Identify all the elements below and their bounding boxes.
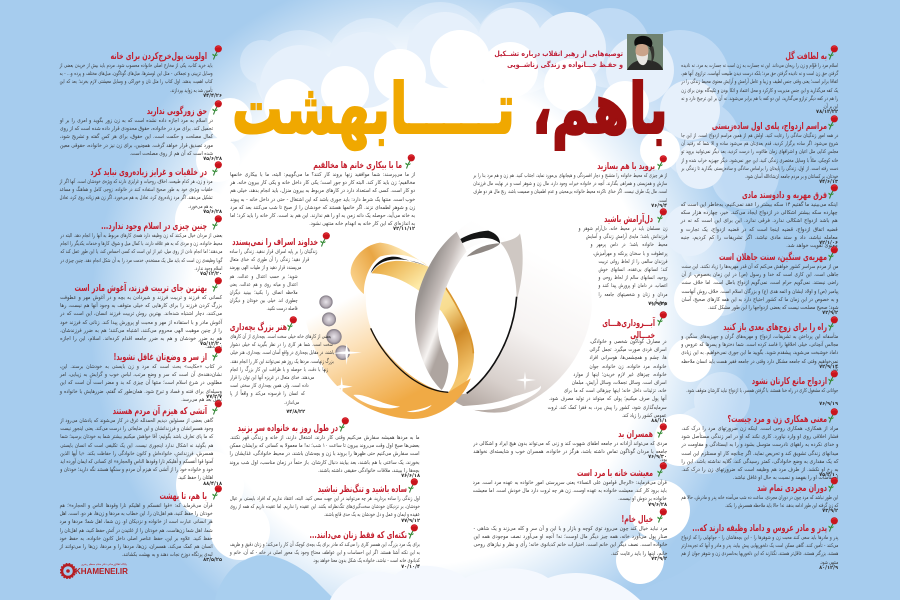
body text: زندگیتان را بر پایه اسراف قرار ندهید. زندگی را ساده قرار دهید؛ زندگی را آن طوری که خدای متعال می‌پسندد قرار دهید و از طیبات الهی بهرمند شوید؛ بر حسب اعتدال و عدالت. هم اعتدال و میانه روی و هم عدالت. یعنی ملاحظه انصاف را بکنید؛ ببینید دیگران چطوری اند. خیلی بین خودتان و دیگران فاصله درست نکنید. [230,249,318,312]
logo [60,563,128,579]
section: left column 3 [59,161,222,215]
body text: کسانی که فرزند و تربیت فرزند و شیردادن به بچه و در آغوش مهر و عطوفت بزرگ کردن فرزند را برای کارهایی که خیلی متوقف به وجود آنها هم نیست، رها می‌کنند، دچار اشتباه شده‌اند. بهترین روش تربیت فرزند انسان، این است که در آغوش مادر و با استفاده از مهر و محبت او پرورش پیدا کند. زنانی که فرزند خود را از چنین موهبت الهی محروم می‌کنند، اشتباه می‌کنند؛ هم به ضرر فرزندشان، هم به ضرر خودشان و هم به ضرر جامعه اقدام کرده‌اند. اسلام، این را اجازه نمی‌دهد. [60,295,222,350]
date: ۷۳/۹/۲ [822,508,838,514]
body text: در اسلام به مرد اجازه داده نشده است که به زن زور بگوید و امری را بر او تحمیل کند. برای مرد در خانواده، حقوق محدودی قرار داده شده است که از روی کمال مصلحت و حکمت است. این حقوق، برای هر کس گفته و تشریح شود، مورد تصدیق قرار خواهد گرفت. همچنین، برای زن نیز در خانواده، حقوقی معین شده است که آن هم از روی مصلحت است. [60,118,213,157]
heading: دوران مجردی تمام شد [757,483,827,494]
body text: اینکه می‌بینید ما گفتیم ۱۴ سکه بیشتر را عقد نمی‌کنیم، به‌خاطر این است که چهارده سکه بیشتر اشکالی در ازدواج ایجاد می‌کند. خیر، چهارده هزار سکه هم باشد ازدواج اشکالی ندارد. فرقی ندارد. این برای این است که نه در قضیه اتفاق ازدواج، قضیه اینجا است که در قضیه ازدواج، یک تجارت و معامله نباشد، داد و ستد مادی نباشد. اگر تشریفات را کم کردیم، جنبه معنوی تقویت خواهد شد. [681,202,838,249]
heading [584,318,655,338]
section: center-right 5 [473,469,667,509]
date: ۷۵/۱۲/۲۰ [200,271,222,277]
body text: متأسفانه این پرداختن به تشریفات، ازدواج و مهریه‌های گران و جهیزیه‌های سنگین و مجالس آنچنانی، خیلی اخلاقها را فاسد کرده است. شما دخترها و پسرها که عروس و داماد خوشبخت می‌شوید، پیشقدم شوید. بگویید ما این جوری نمی‌خواهیم. به این زیادی نمی‌خواهیم وقتی که جامعه مشکل دارد وقتی در جامعه فقیر هست باید انسان ملاحظه کند. [681,334,838,373]
icon: rose [657,423,667,438]
heading: چنین چیزی در اسلام وجود ندارد... [101,221,207,232]
date: ۸۰/۱۲/۹ [819,565,838,571]
icon: rose [828,517,838,532]
section: far right 3 [681,191,838,247]
date: ۸۸/۴/۱۸ [203,481,222,487]
section: left column 7 [60,400,222,487]
icon: rose [657,508,667,523]
icon: rose [408,478,418,493]
icon: rose [828,316,838,331]
heading: ازدواج مانع کارتان نشود [752,376,827,387]
date: ۷۴/۸/۲۲ [286,409,305,415]
icon: rose [657,208,667,223]
body text: مرد نباید خیال کند چون می‌رود توی کوچه و بازار و با این و آن سر و کله می‌زند و یک شاهی - صنار پول می‌آورد خانه، همه چیز دیگر مال اوست؛ نه! آنچه او می‌آورد نصف موجودی همه این خانواده است. نصف دیگر این خانم است. اختیارات خانم کدبانوی خانه؛ رأی و نظر و نیازهای روحی خانم، اینها را باید رعایت کند. [473,526,667,557]
icon: rose [657,311,667,326]
section: left column 2 [60,100,222,162]
section: far right 6 [681,377,838,408]
icon: rose [828,370,838,385]
heading: خداوند اسراف را نمی‌پسندد [232,237,318,248]
heading: راه را برای زوج‌های بعدی باز کنید [723,322,827,333]
date: ۷۵/۲/۱۰ [819,472,838,478]
date: ۷۷/۹/۱۲ [401,518,420,524]
section: left column 5 [60,277,222,350]
body text: مردی که می‌تواند آزادانه در جامعه اطفای شهوت کند و زنی که می‌تواند بدون هیچ ایراد و اشکالی در جامعه با مردان گوناگون تماس داشته باشد، هرگز در خانواده، همسران خوب و شایسته‌ای نخواهند بود. [473,441,667,463]
body text: قرآن می‌فرماید که: «قوا انفسکم و اهلیکم نارا وقودها الناس و الحجاره»؛ هم خودتان را حفظ کنید، هم اهل‌تان را. این خطاب به مردها و زن‌ها، هر دو، است. اهل هر انسانی عبارت است از خانواده و نزدیکان او. زن شما، اهل شما؛ مردها و مرد شما، اهل شما زن‌هاست. هم خودتان را از غلتیدن در آتش حفظ کنید، هم اهل‌تان را حفظ کنید. علاوه بر این، حفظ عناصر اصلی داخل کانون خانواده، به حفظ خود انسان هم کمک می‌کند. همسران، زن‌ها، مردها را و مردها، زن‌ها را می‌توانند از لبه‌ی پرتگاه دوزخ نجات دهند و به بهشت بکشانند. [60,503,213,558]
heading: همسران بد [618,429,653,440]
heading: فرق مهریه و دادوستد مادی [742,190,827,201]
icon: rose [212,485,222,500]
date: ۷۵/۱۲/۲۰ [200,341,222,347]
heading: معیشت خانه با مرد است [577,468,653,479]
heading: دل‌آرامش باشید [604,214,653,225]
heading: در طول روز به خانواده سر بزنید [238,423,338,434]
heading: پدر و مادر عروس و داماد وظیفه دارند که... [692,523,827,534]
icon: rose [212,400,222,415]
body text: برای یک مرد بزرگ، این همسر کاری را می‌کند که مادر برای یک بچه‌ی کوچک آن کار را می‌کند؛ و زنان دقیق و ظریف به این نکته آشنا هستند. اگر این احساسات و این عواطف محتاج وجود یک محور اصلی در خانه - که آن، خانم و کدبانوی خانه است - نباشد، خانواده یک شکل بدون معنا خواهد بود. [230,542,420,564]
body text: ما به مردها همیشه سفارش می‌کنیم وقتی کار دارند، اشتغال دارند، از خانه و زندگی قهر نکنند. بعضی‌ها صبح اول وقت می‌روند بیرون تا ساعت ۱۰ شب؛ نه! ما معمولا به کسانی که برایشان ممکن است سفارش می‌کنیم حتی ظهرها را بروند با زن و بچه‌شان باشند، در محیط خانوادگی، غذایشان را بخورند، یک ساعتی با هم باشند، بعد بیایند دنبال کارشان. باز حتماً در زمان مناسب، اول شب بروند بچه‌ها را ببینند، ملاقات خانوادگی حقیقی داشته باشند. [230,435,420,474]
body text: در همه امور زندگیتان سادگی را رعایت کنید. اولش هم از همین مراسم ازدواج است. از این جا شروع می‌شود. اگر ساده برگزار کردید، قدم بعدی‌تان هم می‌شود ساده و الا شما که رفتید آن مجلس کذایی مثل اعیان و اشرافهای زمان طاغوت را درست کردید، بعد دیگر نمی‌توانید بروید تو خانه کوچکی، مثلاً با وسایل مختصری زندگی کنید. این جور نمی‌شود. دیگر جهیزیه خراب شده و از دست رفته است. از اول، زندگی را پایه‌تان را براساس سادگی و ساده‌زیستی بگذارید تا زندگی بر خودتان، بر کسانتان و بر مردم جامعه ان‌شاءالله آسان شود. [681,133,838,180]
section: far right 9 [681,524,838,572]
date: ۷۶/۹/۳۰ [648,454,667,460]
icon: rose [287,316,297,331]
icon: rose [212,277,222,292]
subtitle: توصیه‌هایی از رهبر انقلاب درباره تشــکیل [494,49,623,58]
body text: در کتاب «حکایت» بحث است که مرد و زن بایستی به خودشان برسند. این، نشان‌دهنده‌ی آن است که سر و وضع مرتب، لباس خوب و گرایش به زیبایی، امر مطلوبی در شرع اسلام است؛ منتها آن چیزی که بد و مضر است آن است که این وسیله‌ای برای فتنه و فساد و تبرج شود. همان‌طور که گفتم، ضررهایش با خانواده و نسل بعد هم می‌رسد. [60,364,222,403]
heading: ما با بیکاری خانم ها مخالفیم [313,160,402,171]
date: ۷۸/۱۲/۲۲ [816,109,838,115]
section: left column 1 [59,45,222,99]
body text: قرآن می‌فرماید: «الرجال قوامون علی النساء» یعنی سرپرستی امور خانواده به عهده مرد است. مرد باید برود کار کند. معیشت خانواده به عهده اوست. زن هر چه ثروت دارد مال خودش است. اما معیشت خانواده بر دوش او نیست. [473,480,667,502]
body text: از ما می‌پرسند: شما موافقید زنها بروند کار کنند؟ ما می‌گوییم: البته، ما با بیکاری خانمها مخالفیم؛ زن باید کار کند. البته کار دو جور است؛ یکی کار داخل خانه و یکی کار بیرون خانه. هر دو کار است. کسی که استعداد دارد در کارهای مربوط به بیرون منزل، باید انجام بدهد، خیلی هم خوب است. منتها یک شرط دارد: باید جوری باشد که این اشتغال - حتی در داخل خانه - به پیوند زن و شوهر لطمه‌ای نزند. اگر خانمها هستند که خودشان را از صبح تا شب می‌کنند بعد که مرد به خانه می‌آید، حوصله یک دانه زمن به او را هم ندارند. این هم بد است. کار خانه را باید کرد؛ اما به اندازه‌ای که این کار خانه به انهدام خانه منتهی نشود. [230,172,415,227]
heading: مهریه‌ی سنگین، سنت جاهلان است [719,252,827,263]
icon: rose [212,161,222,176]
body text: پدر و مادرها باید سعی کنند محبت زن و شوهرها را - این بچه‌هاشان را - جوانهایی را که ازدواج می‌کنند - تأمین کنند. گاهی ممکن است یک دلخوریهایی پیش بیاید، پدر و مادر و آنها که تجربه‌دارتر هستند، بزرگتر هستند، عاقل‌تر هستند، نگذارند که این دلخوریها به‌دلسردی زن و شوهر جوان از هم منتهی شود. [681,535,838,566]
section: left column 4 [60,215,222,277]
icon: rose [212,100,222,115]
body text: اول زندگی را ساده بردارید، هر چه می‌توانید در این جهت سعی کنید. البته، اعتقاد نداریم که افراد بایستی بر عیال خودشان، بر نزدیکان خودشان سخت‌گیری‌های تنگ‌نظرانه بکنند. این عقیده را نداریم. اما عقیده داریم که همه از روی عقیده و ایمان و عمل و دل خودشان به یک حدی قانع باشند. [230,496,420,518]
body text: اسلام مرد را قوّام و زن را ریحان می‌داند. این نه جسارت به زن است نه جسارت به مرد. نه نادیده گرفتن حق زن است و نه نادیده گرفتن حق مرد؛ بلکه درست دیدن طبیعت آنهاست. ترازوی آنها هم، اتفاقا برابر است؛ یعنی وقتی جنس لطیف و زیبا و عامل آرامش و آرایش معنوی محیط زندگی را در یک کفه می‌گذارید و این جنس مدیریت و کارکرد و محل اعتماد و اتکا بودن و تکیه‌گاه بودن برای زن را هم در کفه دیگر ترازو می‌گذارید، این دو کفه با هم برابر می‌شوند. نه آن بر این ترجیح دارد و نه این بر آن. [681,63,838,110]
date: ۷۰/۱۰/۴ [401,564,420,570]
icon: rose [320,232,330,247]
section: center-right 3, wraps around ring [548,311,667,424]
diamonds [319,295,350,360]
icon: rose [657,155,667,170]
icon: rose [339,417,349,432]
heading: هنر بزرگ بچه‌داری [230,322,287,333]
section: center-left 3, wraps around ring [230,316,334,415]
subtitle: و حفـظ خـــانواده و زندگی زناشــویی [507,60,623,69]
section: left column 6 [60,346,222,403]
icon: rose [408,524,418,539]
section: center-right 2, wraps around ring [578,208,668,307]
date: ۷۶/۹/۴ [651,203,667,209]
icon: rose [828,184,838,199]
icon: rose [828,246,838,261]
section: center-left 1 [230,154,415,232]
date: ۷۷/۲/۷ [206,394,222,400]
section: far right 2 [681,122,838,186]
icon: rose [405,154,415,169]
subtitle [494,49,623,69]
date: ۷۲/۱۱/۱۲ [393,226,415,232]
silver ring wide band [448,207,592,413]
date: ۷۴/۶/۱۳ [819,179,838,185]
heading: از سر و وضع‌تان غافل نشوید! [114,352,207,363]
heading: حق زورگویی ندارید [147,106,207,117]
icon: rose [828,45,838,60]
date: ۷۵/۶/۲۸ [203,209,222,215]
logo: پایگاه اطلاع‌رسانی دفتر مقام معظم رهبری [81,563,127,566]
body text: در مصارف گوناگون شخصی و خانوادگی، اسراف فردی صورت میگیرد. تجمل گرائی ها، چشم و همچشمی‌ها، هوسرانی افراد خانواده، مرد خانواده، زن خانواده، جوان خانواده، چیزهای غیر لازم خریدن؛ اینها از موارد اسراف است. وسائل تجملات، وسائل آرایش، مبلمان خانه، تزئینات داخل خانه؛ اینها چیزهائی است که ما برای آنها پول صرف میکنیم؛ پولی که میتواند در تولید مصرف شود، سرمایه‌گذاری شود، کشور را پیش ببرد، به فقرا کمک کند، ثروت عمومی کشور را زیاد کند. [548,339,667,419]
heading: بهترین جای تربیت فرزند، آغوش مادر است [75,283,207,294]
heading: نکته‌ای که فقط زنان می‌دانند... [310,530,407,541]
heading: خیـــالی [630,330,655,341]
date: ۷۲/۹/۱۴ [819,364,838,370]
sparkles [332,343,536,398]
heading: آتشی که هیزم آن مردم هستند [113,406,207,417]
section: center-left 4 [230,417,420,479]
heading: ساده باشید و تنگ‌نظر نباشید [318,484,407,495]
date: ۷۲/۱/۰۶ [819,240,838,246]
icon: rose [828,477,838,492]
date: ۷۹/۶/۲۸ [648,502,667,508]
body text: مرد و زن، هر کدام طبیعت، اخلاق، روحیات و غرایزی دارند که ویژه‌ی خودشان است. آنها اگر از خلقیات ویژه‌ی خود به طور صحیح استفاده کنند در خانواده، زوجی کامل و هماهنگ و مساعد تشکیل می‌دهند. اگر مرد زیاده‌روی کرد، تعادل به هم می‌خورد. اگر زن هم زیاده روی کرد، تعادل به هم می‌خورد. [60,179,213,210]
body text: بعضی از مردان خیال می‌کنند که زن وظیفه دارد همه‌ی کارهای مربوط به آنها را انجام دهد. البته در محیط خانواده، زن و مردی که به هم علاقه دارند، با کمال میل و شوق، کارها و خدمات یکدیگر را انجام می‌دهند؛ اما انجام دادن از روی میل، غیر از این است که کسی احساس کند، یا این طور عمل کند که گویا وظیفه‌ی زن است که باید مثل یک مستخدم، خدمت مرد را به آن شکل انجام دهد. چنین چیزی در اسلام وجود ندارد. [60,233,222,272]
icon: rose [828,115,838,130]
heading: به لطافت گل [785,51,827,62]
heading: با هم، تا بهشت [160,491,207,502]
section: center-left 2, wraps around ring [230,232,330,312]
title: تـــــابهشت [232,68,515,150]
section: left column 8 [59,485,222,563]
section: center-right 6 [473,515,667,563]
gold ring wide band [303,243,471,419]
body text: باید خرید کتاب، یکی از مخارج اصلی خانواده محسوب شود. مردم باید بیش از خریدن بعضی از وسایل تزیینی و تجملاتی - مثل این لوسترها، مبل‌های گوناگون، مبل‌های مختلف و پرده و... - به کتاب اهمیت بدهند. اول کتاب را مثل نان و خوراکی و وسایل معیشتی لازم بخرند؛ بعد که این تأمین شد به زواید بپردازند. [60,63,213,94]
section: far right 5 [681,323,838,371]
date: ۷۱/۹/۲۵ [648,301,667,307]
date: ۷۲/۹/۲ [822,310,838,316]
heading: در خلقیات و غرایز زیاده‌روی نباید کرد [90,167,207,178]
body text: بعضی از کارهای خانه خیلی سخت است. بچه‌داری از آن کارهای سخت است. شما هر کاری را در نظر بگیرید که خیلی دشوار باشند، در مقابل بچه‌داری در واقع آسان است. بچه‌داری، هنر خیلی بزرگ زنهاست. مردها یک روز هم نمی‌توانند این کار را انجام دهند. زنها با دقت، با حوصله و با ظرافت این کار بزرگ را انجام می‌دهند. خدای متعال در غریزه آنها این توان را قرار داده است. ولی همین بچه‌داری کار سختی است که انسان را فرسوده می‌کند و واقعاً از پا می‌اندازد. [230,334,334,406]
body text: این طور نباشد که مرد چون در دوران مجردی، ساعت ده شب می‌آمده خانه پدر و مادرش، حالا هم که زن گرفته این طور ادامه بدهد، نه! حالا باید ملاحظه همسرش را بکند. [681,495,838,509]
section: far right 8 [681,484,838,515]
section: far right 7 [681,415,838,479]
heading: معنی همکاری زن و مرد چیست؟ [728,414,827,425]
section: center-right 1 [473,155,667,209]
date: ۷۴/۴/۲۶ [203,93,222,99]
heading: مراسم ازدواج، پله‌ی اول ساده‌زیستی [712,121,827,132]
heading: آبـــروداری‌هـــای [602,318,655,329]
title: باهم، [532,68,668,150]
date: ۷۶/۶/۱۸ [401,473,420,479]
date: ۸۳/۵/۲۵ [203,557,222,563]
portrait [627,34,663,70]
body text: مراد از همکاری، همکاری روحی است. اینکه زن ضرورتهای مرد را درک کند، فشار اخلاقی روی او وارد نیاورد. کاری نکند که او در امر زندگی مستأصل شود و خدای نکرده به راههای نادرست متوسل بشود و را به ایستادگی و مقاومت در میدانهای زندگی تشویق کند و تحریص نماید. اگر چنانچه کار او مستلزم این است که یک مقداری به وضع خانوادگی، کمتر رسیدگی کند، گلایه نداشته باشد. این را به رخ او نکشد. از طرف مرد هم وظیفه است که ضرورتهای زن را درک کند. احساسات او را بفهمد و نسبت به حال او غافل نباشد. [681,426,838,481]
section: far right 4 [681,253,838,317]
heading: بروید با هم بسازید [597,161,655,172]
date: ۷۳/۹/۲ [651,556,667,562]
body text: من از مردم سراسر کشور خواهش می‌کنم که آن قدر مهریه‌ها را زیاد نکنند. این سنت جاهلی است. این کاری است که خدا و رسول (ص) در این زمان بخصوص، از آن راضی نیستند. نمی‌گویم حرام است، نمی‌گویم ازدواج باطل است. اما خلاف سنت پیامبر (ص) و اولاد ایشان و ائمه هدی (ع) و بزرگان اسلام است. خلاف روش آنهاست و به خصوص در این زمان ما که کشور احتیاج دارد به این همه کارهای صحیح، آسان شود؛ صحیح مصلحت نیست که بعضی ازدواجها را این طور مشکل کنند. [681,264,838,311]
heading: خیال خام! [621,514,653,525]
body text: گاهی بعضی از مسئولین دیدیم الحمدلله غرق در کار می‌شوند که یادشان می‌رود از وجود همسرانشان و فرزندانشان و این ضایعاتی را درست می‌کند. یعنی اینجور نیست که ما پای تعارف باشد بگوئیم: آقا خواهش میکنیم بیشتر شما به خودتان برسید؛ شما هم بگوئید نه اشکال ندارد اینجوری نیست. این یک تکلیفی است که انسان بایستی همسرش، فرزندانش، خانواده‌اش و کانون خانوادگی را حفاظت بکند. «یا أیها الذین آمنوا قوا أنفسکم و أهلیکم نارا وقودها الناس والحجارة» ای کسانی که ایمان آورده اید خود و خانواده خود را از آتشی که هیزم آن مردم و سنگها هستند نگه دارید؛ خودتان و اهلتان را حفظ کنید. [60,418,213,481]
date: ۷۶/۹/۱۹ [819,401,838,407]
logo: KHAMENEI.IR [75,567,128,576]
section: center-left 5 [230,478,420,524]
section: center-right 4 [473,430,667,461]
icon: rose [657,462,667,477]
icon: rose [212,346,222,361]
date: ۷۵/۶/۲۸ [203,156,222,162]
icon: rose [212,215,222,230]
silver ring back band [415,232,467,390]
date: ۸۸/۱/۱ [651,418,667,424]
gold ring inner back band [372,261,474,392]
body text: از هر چیزی که محیط خانواده را متشنج و دچار افسردگی و هیجانهای بی‌مورد نماید، اجتناب کنید. هم زن و هم مرد بنا را بر سازش و همزیستی و همراهی بگذارند. آنچه در خانواده خیرات وجود دارد، مال زن و شوهر است و در نهایت مال فرزندان است، مال یک طرف نیست. اگر خدای ناکرده محیط خانواده بی‌محبتی و عدم اطمینان و صمیمت باشد، رنج مال هر دو طرف است. [473,173,667,204]
heading: اولویت پول‌خرج‌کردن برای خانه [110,51,207,62]
icon: rose [212,45,222,60]
body text: زن مسلمان باید در محیط خانه، دل‌آرام شوهر و فرزندانش باشد؛ مایه‌ی آرامش زندگی و آسایش محیط خانواده باشد؛ در دامن پرمهر و پرعطوفت و با سخنان پرنکته و مهرآمیزش، فرزندان سالمی را از لحاظ روانی تربیت کند؛ انسانهای بی‌عقده، انسانهای خوش روحیه، انسانهای سالم از لحاظ روحی و اعصاب، در دامان او پرورش پیدا کنند و مردان و زنان و شخصیتهای جامعه را بوجود آورد. [578,226,667,306]
section: far right 1 [681,52,838,116]
body text: جوانانی که مشغول کاری در راه خدا هستند، با گرفتن همسر، با ازدواج نباید کارشان متوقف شود. [686,388,838,394]
icon: rose [828,408,838,423]
section: center-left 6 [230,524,420,570]
